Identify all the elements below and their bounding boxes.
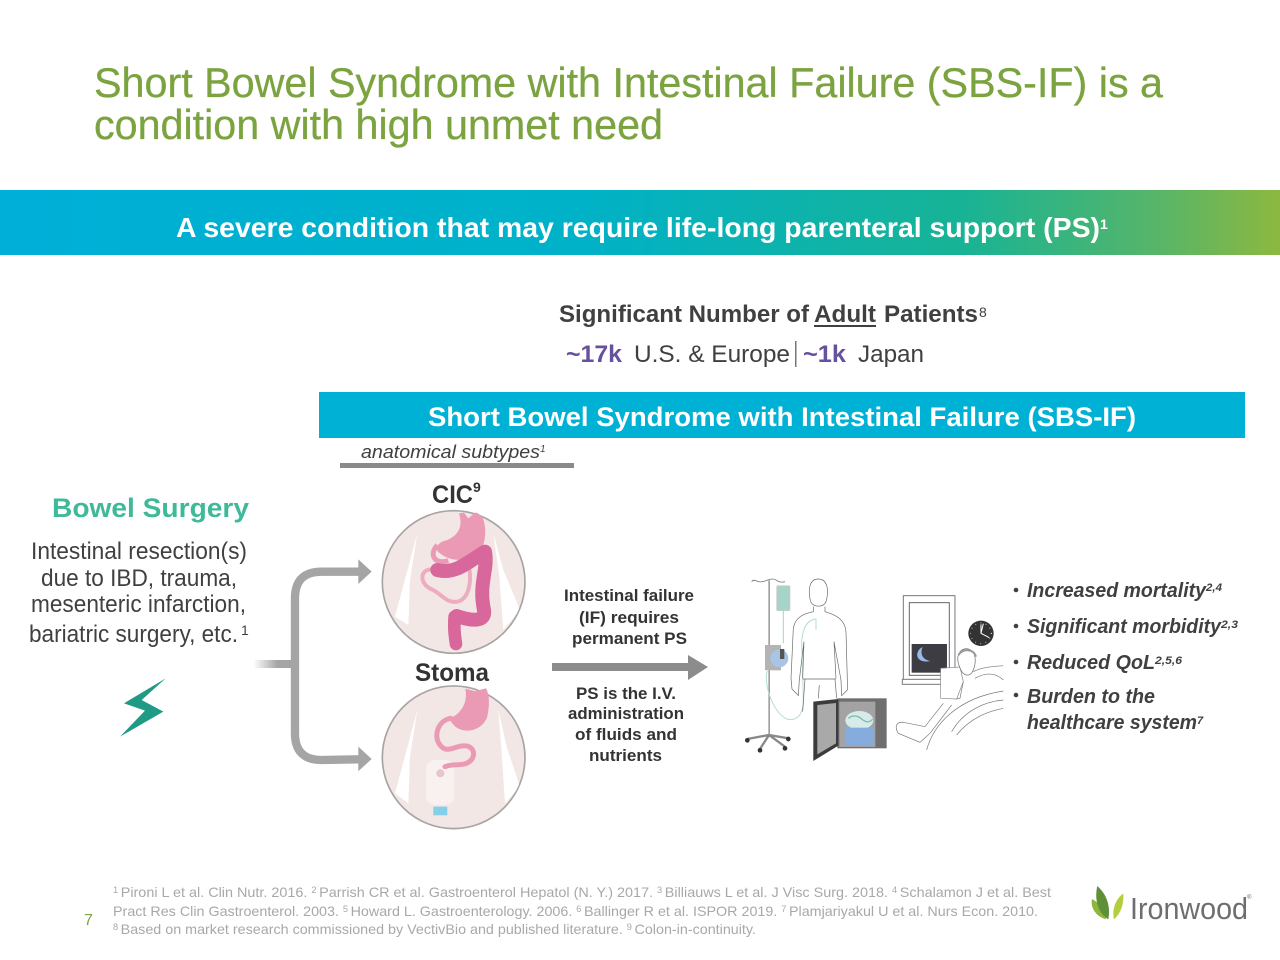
arrow: branching to subtypes — [253, 559, 372, 771]
references: Colon-in-continuity. — [635, 921, 756, 937]
outcomes list: healthcare system — [1027, 712, 1197, 734]
patient numbers: ~17k — [566, 341, 623, 368]
outcomes list: 2,5,6 — [1154, 655, 1183, 667]
intestinal failure text: permanent PS — [572, 629, 687, 648]
intestinal failure text: of fluids and — [575, 725, 677, 744]
logo: Ironwood — [1092, 886, 1252, 926]
intestinal failure text: Intestinal failure — [564, 586, 694, 605]
icon: lightning bolt — [120, 678, 166, 737]
patient numbers — [559, 301, 987, 368]
illustration: patient with IV — [745, 579, 847, 753]
bowel surgery text: mesenteric infarction, — [31, 591, 246, 618]
page number: 7 — [84, 912, 93, 929]
outcomes list: 2,3 — [1220, 619, 1238, 631]
references: Pironi L et al. Clin Nutr. 2016. — [121, 884, 311, 900]
logo: Ironwood: Ironwood — [1130, 891, 1248, 926]
patient numbers: Adult — [814, 301, 876, 328]
outcomes list: 7 — [1197, 715, 1204, 727]
references: Billiauws L et al. J Visc Surg. 2018. — [665, 884, 892, 900]
bowel surgery text: bariatric surgery, etc. — [29, 621, 238, 648]
Stoma heading: Stoma — [415, 659, 490, 687]
references: Ballinger R et al. ISPOR 2019. — [584, 903, 781, 919]
title — [94, 59, 1164, 148]
references: 5 — [343, 904, 351, 914]
patient numbers: Patients — [884, 301, 978, 328]
outcomes list: Burden to the — [1027, 686, 1155, 708]
references: 2 — [311, 885, 319, 895]
outcomes list — [1014, 580, 1238, 734]
outcomes list: Reduced QoL — [1027, 652, 1155, 674]
bowel surgery text: due to IBD, trauma, — [41, 565, 237, 592]
references: Parrish CR et al. Gastroenterol Hepatol (N. Y.) 2017. — [319, 884, 657, 900]
anatomical subtypes label: anatomical subtypes — [361, 442, 540, 462]
references: Pract Res Clin Gastroenterol. 2003. — [113, 903, 334, 919]
patient numbers: Japan — [858, 341, 924, 368]
banner: severe condition — [0, 190, 1280, 255]
bowel surgery text: 1 — [241, 622, 249, 638]
icon: clock — [968, 621, 994, 646]
outcomes list: Significant morbidity — [1027, 616, 1222, 638]
outcomes list: 2,4 — [1205, 582, 1222, 594]
patient numbers: U.S. & Europe — [634, 341, 790, 368]
illustration: patient in bed — [896, 649, 1003, 750]
intestinal failure text — [564, 586, 694, 765]
anatomical subtypes label — [340, 442, 574, 468]
references: 1 — [113, 885, 121, 895]
arrow: to treatment — [552, 655, 708, 680]
illustration: IV fridge — [813, 698, 887, 761]
banner: severe condition: 1 — [1100, 216, 1108, 232]
illustration: window at night — [902, 596, 955, 684]
CIC heading: 9 — [473, 479, 481, 495]
outcomes list: Increased mortality — [1027, 580, 1207, 602]
patient numbers: 8 — [979, 304, 987, 320]
intestinal failure text: administration — [568, 704, 684, 723]
icon: stoma anatomy — [382, 686, 525, 829]
bowel surgery text — [29, 493, 249, 648]
patient numbers: ~1k — [803, 341, 847, 368]
bowel surgery text: Intestinal resection(s) — [31, 538, 247, 565]
CIC heading: CIC — [432, 481, 473, 509]
references: Schalamon J et al. Best — [900, 884, 1051, 900]
anatomical subtypes label: 1 — [540, 444, 546, 455]
references — [113, 884, 1051, 937]
logo: Ironwood: ® — [1247, 894, 1252, 901]
title: condition with high unmet need — [94, 101, 663, 148]
header bar: SBS-IF — [319, 392, 1245, 438]
references: 3 — [657, 885, 665, 895]
references: Based on market research commissioned by VectivBio and published literature. — [121, 921, 627, 937]
title: Short Bowel Syndrome with Intestinal Failure (SBS-IF) is a — [94, 59, 1164, 106]
icon: CIC anatomy — [382, 511, 525, 653]
intestinal failure text: PS is the I.V. — [576, 684, 676, 703]
header bar: SBS-IF: Short Bowel Syndrome with Intestinal Failure (SBS-IF) — [428, 402, 1136, 432]
references: Howard L. Gastroenterology. 2006. — [351, 903, 576, 919]
patient numbers: Significant Number of — [559, 301, 810, 328]
references: 9 — [627, 922, 635, 932]
references: 4 — [892, 885, 900, 895]
references: Plamjariyakul U et al. Nurs Econ. 2010. — [789, 903, 1038, 919]
references: 6 — [576, 904, 584, 914]
banner: severe condition: A severe condition that may require life-long parenteral support (PS) — [176, 212, 1100, 243]
bowel surgery text: Bowel Surgery — [52, 493, 249, 523]
intestinal failure text: nutrients — [589, 746, 662, 765]
references: 8 — [113, 922, 121, 932]
references: 7 — [781, 904, 789, 914]
intestinal failure text: (IF) requires — [579, 608, 679, 627]
